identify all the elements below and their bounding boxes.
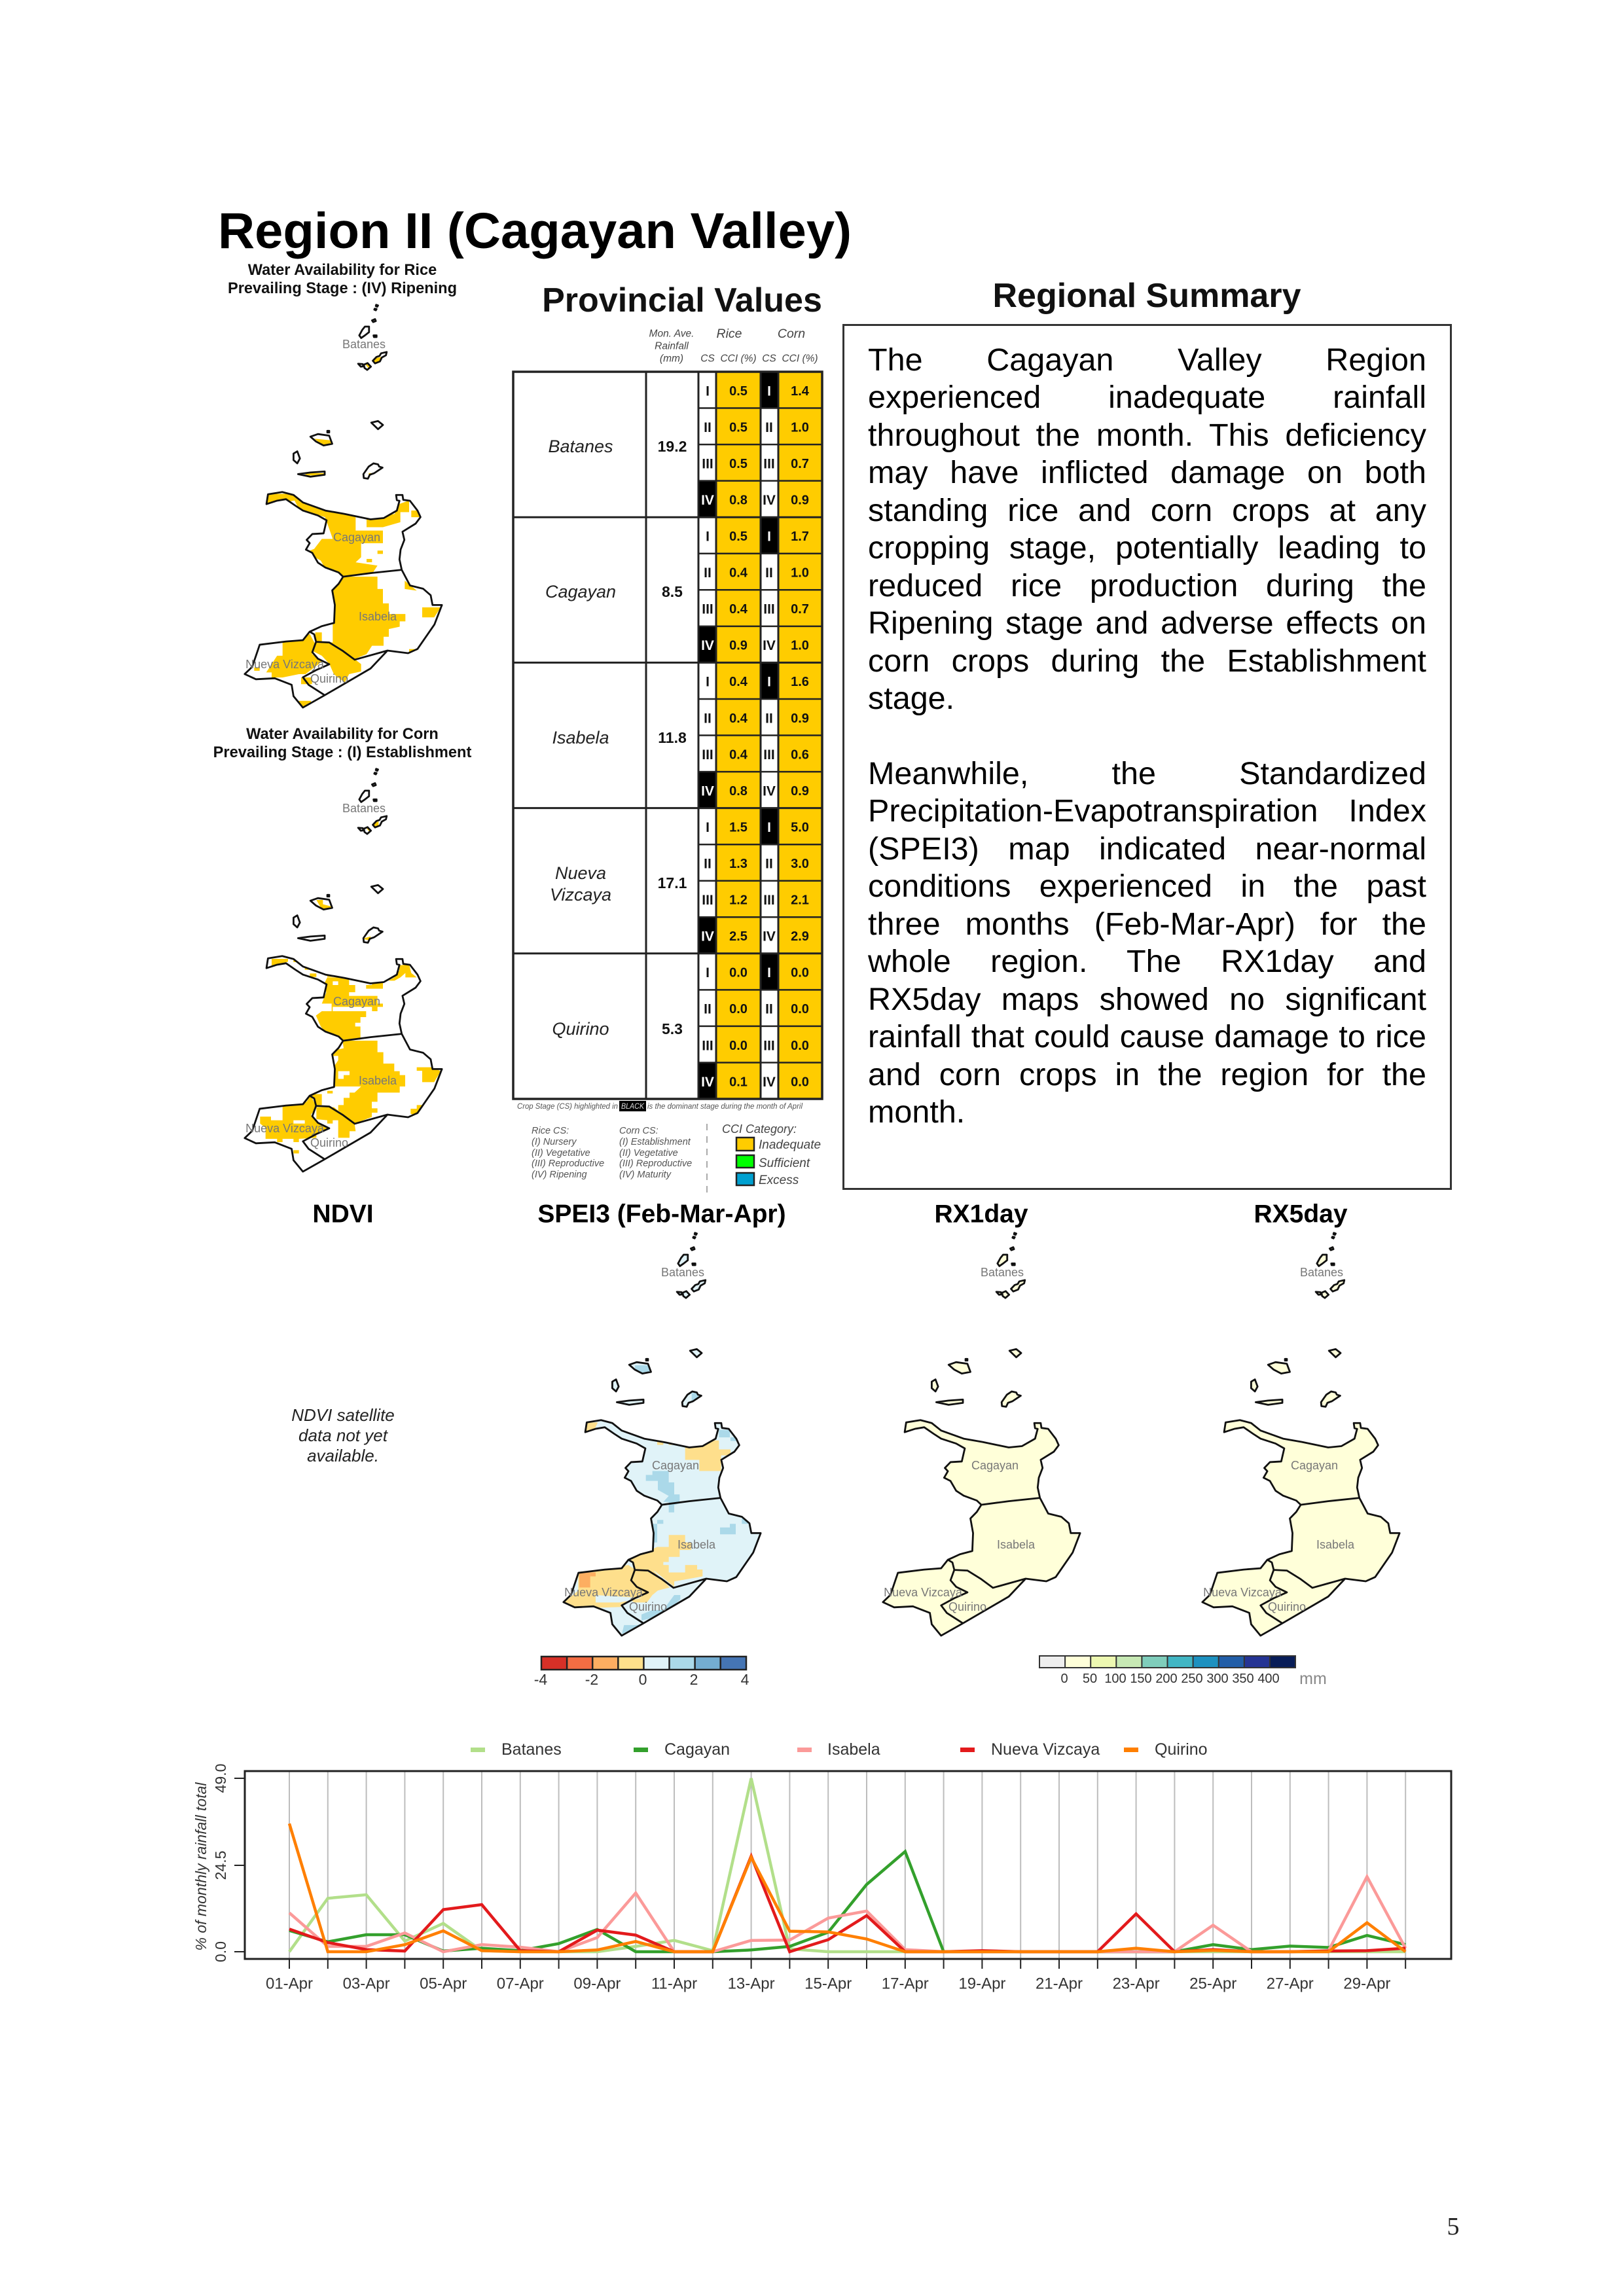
legend: rainfall colour bar: 400 xyxy=(1257,1672,1280,1686)
row group: Isabela: 0.4 xyxy=(729,675,748,689)
legend: CCI category: Sufficient xyxy=(759,1157,810,1170)
row group: Nueva Vizcaya: 1.3 xyxy=(729,857,748,871)
row group: Quirino xyxy=(552,965,809,1090)
row group: Isabela: 0.9 xyxy=(791,784,809,798)
panel: regional summary text: The Cagayan Valley Region xyxy=(868,342,1426,378)
row group: Batanes: 0.8 xyxy=(729,493,748,507)
row group: Cagayan: 0.9 xyxy=(729,639,748,653)
map: RX5day: Cagayan xyxy=(1291,1459,1338,1472)
heading: SPEI3: SPEI3 (Feb-Mar-Apr) xyxy=(537,1200,786,1228)
legend: rainfall colour bar: mm xyxy=(1299,1670,1327,1688)
heading: water availability for rice: Prevailing Stage : (IV) Ripening xyxy=(228,280,457,297)
legend: rainfall colour bar: 100 xyxy=(1104,1672,1127,1686)
chart legend: Nueva Vizcaya xyxy=(991,1740,1100,1759)
map: RX1day: Nueva Vizcaya xyxy=(884,1586,963,1599)
row group: Cagayan: I xyxy=(706,529,710,545)
panel: regional summary text: throughout the month. This deficiency xyxy=(868,418,1426,453)
map: corn water availability xyxy=(245,769,442,1172)
map: RX5day: Nueva Vizcaya xyxy=(1203,1586,1282,1599)
row group: Nueva Vizcaya: 1.2 xyxy=(729,893,748,907)
row group: Isabela: 0.9 xyxy=(791,711,809,726)
row group: Quirino: IV xyxy=(701,1075,714,1090)
map: corn water availability: Batanes xyxy=(342,802,386,815)
panel: regional summary text xyxy=(842,324,1452,1190)
series: Batanes xyxy=(289,1778,1405,1952)
panel: regional summary text: may have inflicted damage on both xyxy=(868,455,1426,490)
row group: Cagayan: 1.0 xyxy=(791,565,809,580)
row group: Nueva Vizcaya: 2.9 xyxy=(791,929,809,944)
map: RX1day: Batanes xyxy=(981,1266,1024,1279)
row group: Nueva Vizcaya: 3.0 xyxy=(791,857,809,871)
chart legend: Isabela xyxy=(827,1740,880,1759)
note: NDVI data unavailable xyxy=(291,1405,395,1465)
row group: Isabela: IV xyxy=(763,783,776,798)
legend: rice crop stages xyxy=(532,1126,604,1180)
row group: Batanes: III xyxy=(702,456,713,471)
line chart: daily share of monthly rainfall: 27-Apr xyxy=(1267,1975,1314,1992)
row group: Batanes xyxy=(548,384,810,508)
row group: Nueva Vizcaya: III xyxy=(763,893,775,908)
row group: Quirino: II xyxy=(765,1002,773,1017)
row group: Cagayan: I xyxy=(767,529,771,545)
row group: Cagayan: III xyxy=(763,602,775,617)
line chart: daily share of monthly rainfall: 19-Apr xyxy=(958,1975,1005,1992)
heading: water availability for corn: Prevailing Stage : (I) Establishment xyxy=(213,744,471,761)
row group: Cagayan: 8.5 xyxy=(662,583,683,600)
row group: Isabela: III xyxy=(702,747,713,762)
legend: rice crop stages: (I) Nursery xyxy=(532,1137,577,1147)
heading: NDVI: NDVI xyxy=(312,1200,374,1228)
map: SPEI3: Isabela xyxy=(677,1538,716,1551)
map: RX5day: Isabela xyxy=(1316,1538,1355,1551)
line chart: daily share of monthly rainfall: 09-Apr xyxy=(573,1975,621,1992)
map: RX1day: Quirino xyxy=(948,1600,986,1613)
row group: Isabela: I xyxy=(767,675,771,690)
table: provincial values xyxy=(513,372,822,1099)
legend: corn crop stages: (III) Reproductive xyxy=(619,1158,692,1169)
page number: 5 xyxy=(1447,2213,1460,2240)
heading: RX1day: RX1day xyxy=(934,1200,1028,1228)
legend: rice crop stages: (III) Reproductive xyxy=(532,1158,604,1169)
row group: Quirino: 0.0 xyxy=(729,1039,748,1053)
row group: Quirino: 0.0 xyxy=(729,1002,748,1016)
row group: Quirino: III xyxy=(702,1038,713,1053)
map: SPEI3: Cagayan xyxy=(652,1459,699,1472)
row group: Isabela: I xyxy=(706,675,710,690)
line chart: daily share of monthly rainfall xyxy=(192,1764,1451,1992)
map: corn water availability: Nueva Vizcaya xyxy=(245,1122,325,1135)
note: NDVI data unavailable: data not yet xyxy=(298,1426,389,1445)
row group: Cagayan: 0.5 xyxy=(729,529,748,544)
row group: Quirino: 0.0 xyxy=(791,1075,809,1089)
legend: corn crop stages: (I) Establishment xyxy=(619,1137,691,1147)
row group: Isabela: II xyxy=(765,711,773,726)
chart legend xyxy=(471,1740,1208,1759)
line chart: daily share of monthly rainfall: 17-Apr xyxy=(882,1975,929,1992)
row group: Cagayan: II xyxy=(704,565,712,581)
row group: Cagayan: IV xyxy=(763,638,776,653)
legend: corn crop stages: (IV) Maturity xyxy=(619,1170,672,1180)
row group: Quirino: IV xyxy=(763,1075,776,1090)
row group: Quirino: I xyxy=(706,965,710,980)
row group: Batanes: 0.5 xyxy=(729,457,748,471)
panel: regional summary text: (SPEI3) map indicated near-normal xyxy=(868,831,1426,867)
row group: Isabela xyxy=(552,675,809,798)
map: RX1day xyxy=(883,1233,1080,1636)
line chart: daily share of monthly rainfall: 05-Apr xyxy=(420,1975,467,1992)
map: SPEI3 xyxy=(564,1233,761,1636)
legend: SPEI colour bar: 2 xyxy=(690,1671,698,1688)
legend: rainfall colour bar: 50 xyxy=(1083,1672,1097,1686)
heading: regional summary: Regional Summary xyxy=(992,277,1301,315)
legend: rainfall colour bar: 200 xyxy=(1155,1672,1178,1686)
row group: Quirino: 0.0 xyxy=(791,966,809,980)
panel: regional summary text: whole region. The RX1day and xyxy=(868,944,1426,979)
legend: rice crop stages: Rice CS: xyxy=(532,1126,569,1136)
row group: Batanes: II xyxy=(704,420,712,435)
line chart: daily share of monthly rainfall: 29-Apr xyxy=(1343,1975,1390,1992)
row group: Quirino: 0.0 xyxy=(791,1039,809,1053)
row group: Nueva Vizcaya: II xyxy=(765,856,773,872)
panel: regional summary text: rainfall that could cause damage to rice xyxy=(868,1019,1426,1054)
line chart: daily share of monthly rainfall: 24.5 xyxy=(212,1851,229,1880)
row group: Isabela: III xyxy=(763,747,775,762)
heading: RX5day: RX5day xyxy=(1254,1200,1348,1228)
panel: regional summary text: experienced inadequate rainfall xyxy=(868,380,1426,415)
row group: Nueva Vizcaya: Nueva xyxy=(555,863,606,883)
table header: Mon. Ave. xyxy=(649,329,694,339)
map: rice water availability: Quirino xyxy=(310,672,348,685)
map: rice water availability: Nueva Vizcaya xyxy=(245,658,325,671)
row group: Cagayan: 1.0 xyxy=(791,639,809,653)
table header: CCI (%) xyxy=(782,353,818,364)
row group: Isabela: 0.8 xyxy=(729,784,748,798)
row group: Cagayan: 0.4 xyxy=(729,565,748,580)
line chart: daily share of monthly rainfall: 23-Apr xyxy=(1113,1975,1160,1992)
legend: rice crop stages: (II) Vegetative xyxy=(532,1148,590,1158)
line chart: daily share of monthly rainfall: 15-Apr xyxy=(804,1975,852,1992)
series: Quirino xyxy=(289,1823,1405,1952)
row group: Batanes: I xyxy=(706,384,710,399)
legend: rice crop stages: (IV) Ripening xyxy=(532,1170,587,1180)
table header: Corn xyxy=(778,327,805,341)
title: Region II (Cagayan Valley) xyxy=(218,203,852,259)
line chart: daily share of monthly rainfall: 13-Apr xyxy=(728,1975,775,1992)
series: Cagayan xyxy=(289,1852,1405,1952)
heading: water availability for corn: Water Availability for Corn xyxy=(246,726,439,743)
row group: Cagayan: Cagayan xyxy=(545,582,616,601)
panel: regional summary text: conditions experienced in the past xyxy=(868,869,1426,904)
heading: water availability for corn xyxy=(213,726,471,761)
table header: CCI (%) xyxy=(720,353,757,364)
legend: corn crop stages xyxy=(619,1126,692,1180)
panel: regional summary text: reduced rice production during the xyxy=(868,568,1426,603)
line chart: daily share of monthly rainfall: 49.0 xyxy=(212,1764,229,1793)
panel: regional summary text: Precipitation-Evapotranspiration Index xyxy=(868,793,1426,829)
line chart: daily share of monthly rainfall: 25-Apr xyxy=(1189,1975,1236,1992)
map: SPEI3: Nueva Vizcaya xyxy=(564,1586,643,1599)
row group: Batanes: 0.5 xyxy=(729,384,748,399)
row group: Quirino: Quirino xyxy=(552,1019,609,1039)
row group: Cagayan: IV xyxy=(701,638,714,653)
legend: CCI category: Excess xyxy=(759,1174,799,1187)
row group: Cagayan: II xyxy=(765,565,773,581)
row group: Cagayan: 0.4 xyxy=(729,602,748,617)
row group: Cagayan: 1.7 xyxy=(791,529,809,544)
table footnote xyxy=(517,1101,803,1111)
row group: Batanes: 0.7 xyxy=(791,457,809,471)
chart legend: Quirino xyxy=(1155,1740,1208,1759)
legend: SPEI colour bar: 0 xyxy=(639,1671,647,1688)
panel: regional summary text: and corn crops in the region for the xyxy=(868,1057,1426,1092)
legend: SPEI colour bar: -2 xyxy=(585,1671,598,1688)
map: corn water availability: Quirino xyxy=(310,1136,348,1149)
row group: Cagayan xyxy=(545,529,809,653)
legend: CCI category: Inadequate xyxy=(759,1138,821,1152)
row group: Quirino: I xyxy=(767,965,771,980)
legend: rainfall colour bar: 350 xyxy=(1232,1672,1254,1686)
row group: Batanes: II xyxy=(765,420,773,435)
table footnote: is the dominant stage during the month of April xyxy=(647,1102,803,1111)
panel: regional summary text: corn crops during the Establishment xyxy=(868,643,1426,679)
row group: Nueva Vizcaya: I xyxy=(706,820,710,835)
map: RX1day: Isabela xyxy=(997,1538,1036,1551)
row group: Isabela: II xyxy=(704,711,712,726)
row group: Batanes: 1.0 xyxy=(791,420,809,435)
line chart: daily share of monthly rainfall: 07-Apr xyxy=(497,1975,544,1992)
panel: regional summary text: Ripening stage and adverse effects on xyxy=(868,605,1426,641)
table header: CS xyxy=(700,353,715,364)
row group: Batanes: IV xyxy=(701,493,714,508)
table footnote: BLACK xyxy=(621,1102,645,1111)
line chart: daily share of monthly rainfall: 21-Apr xyxy=(1036,1975,1083,1992)
table header: Rice xyxy=(716,327,742,341)
row group: Batanes: I xyxy=(767,384,771,399)
row group: Nueva Vizcaya: II xyxy=(704,856,712,872)
legend: rainfall colour bar xyxy=(1039,1656,1327,1688)
series: Nueva Vizcaya xyxy=(289,1856,1405,1952)
line chart: daily share of monthly rainfall: 0.0 xyxy=(212,1941,229,1962)
panel: regional summary text: month. xyxy=(868,1094,965,1130)
row group: Isabela: 0.6 xyxy=(791,747,809,762)
series: Isabela xyxy=(289,1876,1405,1952)
legend: CCI category xyxy=(722,1122,821,1187)
row group: Batanes: 0.5 xyxy=(729,420,748,435)
line chart: daily share of monthly rainfall: 11-Apr xyxy=(651,1975,697,1992)
row group: Isabela: Isabela xyxy=(552,728,609,747)
note: NDVI data unavailable: available. xyxy=(307,1446,379,1465)
legend: rainfall colour bar: 0 xyxy=(1060,1672,1068,1686)
heading: provincial values: Provincial Values xyxy=(542,281,822,319)
row group: Quirino: II xyxy=(704,1002,712,1017)
row group: Isabela: 0.4 xyxy=(729,711,748,726)
line chart: daily share of monthly rainfall: % of monthly rainfall total xyxy=(192,1782,209,1950)
table footnote: Crop Stage (CS) highlighted in xyxy=(517,1102,618,1111)
heading: water availability for rice: Water Availability for Rice xyxy=(248,262,437,279)
panel: regional summary text: Meanwhile, the Standardized xyxy=(868,756,1426,791)
row group: Batanes: 1.4 xyxy=(791,384,810,399)
line chart: daily share of monthly rainfall: 03-Apr xyxy=(343,1975,390,1992)
row group: Quirino: 0.0 xyxy=(791,1002,809,1016)
row group: Isabela: 1.6 xyxy=(791,675,809,689)
row group: Isabela: 11.8 xyxy=(658,729,687,746)
panel: regional summary text: stage. xyxy=(868,681,954,716)
legend: SPEI colour bar: -4 xyxy=(534,1671,547,1688)
row group: Nueva Vizcaya: 17.1 xyxy=(658,874,687,891)
row group: Batanes: Batanes xyxy=(548,437,613,456)
legend: SPEI colour bar: 4 xyxy=(741,1671,749,1688)
map: RX1day: Cagayan xyxy=(971,1459,1019,1472)
map: corn water availability: Cagayan xyxy=(333,995,380,1008)
chart legend: Batanes xyxy=(501,1740,562,1759)
row group: Batanes: IV xyxy=(763,493,776,508)
legend: rainfall colour bar: 150 xyxy=(1130,1672,1152,1686)
chart legend: Cagayan xyxy=(664,1740,730,1759)
row group: Quirino: 5.3 xyxy=(662,1020,683,1037)
map: rice water availability: Batanes xyxy=(342,338,386,351)
legend: corn crop stages: Corn CS: xyxy=(619,1126,659,1136)
row group: Nueva Vizcaya xyxy=(550,820,809,944)
map: RX5day xyxy=(1202,1233,1399,1636)
row group: Batanes: 0.9 xyxy=(791,493,809,507)
row group: Nueva Vizcaya: I xyxy=(767,820,771,835)
row group: Nueva Vizcaya: 5.0 xyxy=(791,820,809,834)
heading: water availability for rice xyxy=(228,262,457,297)
panel: regional summary text: three months (Feb-Mar-Apr) for the xyxy=(868,906,1426,942)
row group: Nueva Vizcaya: IV xyxy=(701,929,714,944)
map: corn water availability: Isabela xyxy=(359,1074,397,1087)
map: RX5day: Batanes xyxy=(1300,1266,1343,1279)
row group: Nueva Vizcaya: Vizcaya xyxy=(550,885,611,905)
map: RX5day: Quirino xyxy=(1268,1600,1306,1613)
row group: Cagayan: 0.7 xyxy=(791,602,809,617)
row group: Isabela: IV xyxy=(701,783,714,798)
legend: CCI category: CCI Category: xyxy=(722,1122,797,1136)
table header: (mm) xyxy=(660,353,683,364)
row group: Nueva Vizcaya: 1.5 xyxy=(729,820,748,834)
map: rice water availability xyxy=(245,305,442,708)
legend: rainfall colour bar: 300 xyxy=(1206,1672,1229,1686)
legend: rainfall colour bar: 250 xyxy=(1181,1672,1203,1686)
legend: corn crop stages: (II) Vegetative xyxy=(619,1148,678,1158)
row group: Nueva Vizcaya: 2.1 xyxy=(791,893,809,907)
row group: Nueva Vizcaya: 2.5 xyxy=(729,929,748,944)
row group: Cagayan: III xyxy=(702,602,713,617)
note: NDVI data unavailable: NDVI satellite xyxy=(291,1405,395,1425)
map: SPEI3: Batanes xyxy=(661,1266,704,1279)
row group: Batanes: III xyxy=(763,456,775,471)
legend: SPEI colour bar xyxy=(534,1657,749,1688)
map: rice water availability: Cagayan xyxy=(333,531,380,544)
row group: Quirino: 0.0 xyxy=(729,966,748,980)
panel: regional summary text: cropping stage, potentially leading to xyxy=(868,530,1426,565)
row group: Quirino: 0.1 xyxy=(729,1075,748,1089)
table header: Rainfall xyxy=(655,340,689,352)
line chart: daily share of monthly rainfall: 01-Apr xyxy=(266,1975,313,1992)
map: SPEI3: Quirino xyxy=(629,1600,667,1613)
map: rice water availability: Isabela xyxy=(359,610,397,623)
row group: Nueva Vizcaya: IV xyxy=(763,929,776,944)
row group: Nueva Vizcaya: III xyxy=(702,893,713,908)
table header xyxy=(649,327,818,364)
row group: Batanes: 19.2 xyxy=(658,438,687,455)
table header: CS xyxy=(762,353,776,364)
row group: Quirino: III xyxy=(763,1038,775,1053)
panel: regional summary text: RX5day maps showed no significant xyxy=(868,982,1426,1017)
row group: Isabela: 0.4 xyxy=(729,747,748,762)
panel: regional summary text: standing rice and corn crops at any xyxy=(868,493,1426,528)
